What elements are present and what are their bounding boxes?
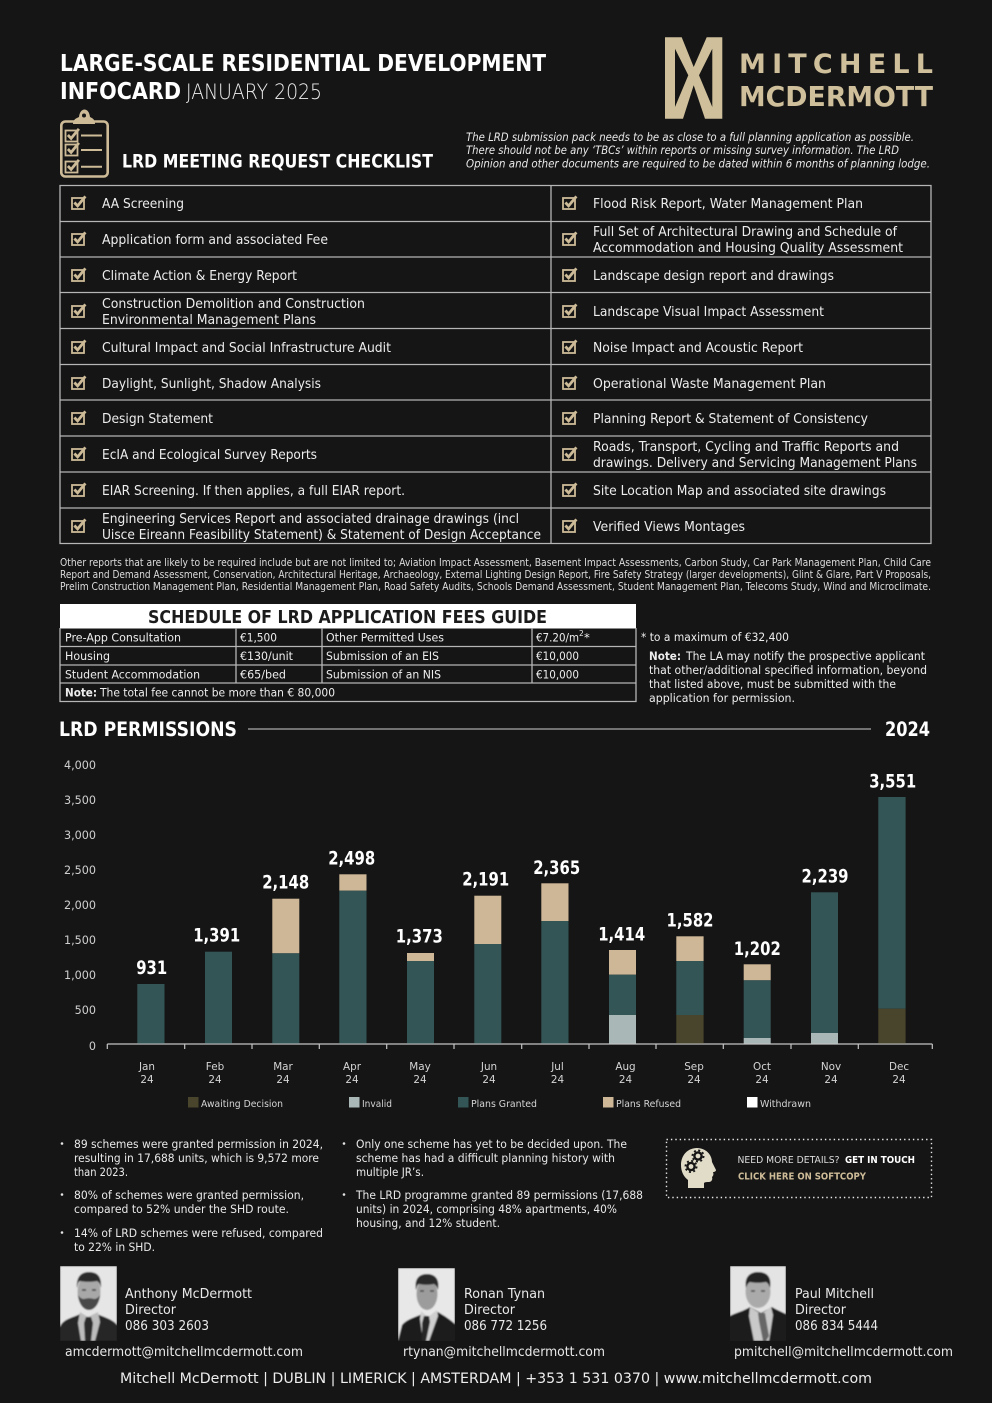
bar: Dec: 3,551 (869, 771, 916, 792)
bullet list: middle: Only one scheme has yet to be decided upon. The (356, 1137, 627, 1151)
y axis labels: 2,000 (64, 899, 96, 912)
bar: May (396, 927, 443, 1086)
intro note (466, 130, 930, 170)
bar: Aug (598, 925, 645, 1086)
fees row 3: €65/bed (240, 668, 286, 682)
fees row 3 (65, 668, 579, 682)
y axis labels: 3,000 (64, 829, 96, 842)
checklist row 8 right: drawings. Delivery and Servicing Management Plans (593, 456, 917, 471)
checklist row 10 left (72, 512, 541, 543)
checklist row 3 left: Climate Action & Energy Report (102, 269, 297, 284)
bullet list: middle: multiple JR’s. (356, 1165, 424, 1179)
bar: Dec (869, 771, 916, 1086)
checklist row 2 left: Application form and associated Fee (102, 233, 328, 248)
chart legend: Awaiting Decision (201, 1099, 283, 1110)
heading: LRD permissions (59, 718, 930, 741)
photo: Ronan Tynan (398, 1268, 455, 1341)
fees side note: application for permission. (649, 691, 795, 705)
title: JANUARY 2025 (186, 80, 322, 104)
fees row 3: Student Accommodation (65, 668, 200, 682)
bar: Jul: 24 (551, 1074, 564, 1086)
logo: Mitchell McDermott: MITCHELL (739, 49, 933, 80)
checklist row 5 right: Noise Impact and Acoustic Report (593, 341, 803, 356)
bullet list: left (61, 1137, 323, 1254)
checklist row 1 right: Flood Risk Report, Water Management Plan (593, 197, 863, 212)
logo: Mitchell McDermott: MCDERMOTT (739, 81, 933, 113)
panel: fees table (60, 604, 636, 702)
bar: Dec: 24 (892, 1074, 906, 1086)
bar: Jul (533, 858, 580, 1086)
bar: Nov: Nov (821, 1061, 841, 1073)
checklist row 9 left: EIAR Screening. If then applies, a full EIAR report. (102, 484, 405, 499)
bar: Apr: Apr (343, 1061, 362, 1073)
bar: Aug: 1,414 (598, 925, 645, 946)
title (60, 49, 546, 105)
x axis (107, 1044, 932, 1049)
checklist row 3 right: Landscape design report and drawings (593, 269, 834, 284)
bar: Jan: Jan (138, 1061, 155, 1073)
bar: May: 24 (413, 1074, 427, 1086)
other reports text block (60, 557, 931, 593)
intro note: There should not be any ‘TBCs’ within reports or missing survey information. The LRD (466, 143, 899, 157)
bullet list: left: compared to 52% under the SHD route. (74, 1202, 289, 1216)
heading: LRD permissions: LRD PERMISSIONS (59, 718, 237, 741)
checklist row 4 left: Environmental Management Plans (102, 313, 316, 328)
contact: Ronan Tynan: Director (464, 1303, 515, 1318)
photo: Paul Mitchell (730, 1266, 786, 1341)
checklist row 7 right: Planning Report & Statement of Consistency (593, 412, 868, 427)
bar: Jun (462, 870, 509, 1086)
bullet list: middle: units) in 2024, comprising 48% apartments, 40% (356, 1202, 617, 1216)
callout: get in touch: CLICK HERE ON SOFTCOPY (738, 1172, 867, 1182)
y axis labels (64, 759, 96, 1053)
y axis labels: 4,000 (64, 759, 96, 772)
checklist row 10 right: Verified Views Montages (593, 520, 745, 535)
bullet list: middle: scheme has had a difficult planning history with (356, 1151, 615, 1165)
fees row 3: €10,000 (536, 668, 579, 682)
intro note: The LRD submission pack needs to be as close to a full planning application as possible. (466, 130, 914, 144)
footer: Mitchell McDermott | DUBLIN | LIMERICK | AMSTERDAM | +353 1 531 0370 | www.mitchellmcdermott.com (120, 1370, 872, 1387)
bar: Mar: Mar (273, 1061, 294, 1073)
fees side note: that other/additional specified information, beyond (649, 663, 927, 677)
checklist row 10 left: Engineering Services Report and associated drainage drawings (incl (102, 512, 519, 527)
bar: Sep: 24 (687, 1074, 701, 1086)
bar: Mar (262, 872, 309, 1086)
contact: Paul Mitchell: pmitchell@mitchellmcdermott.com (734, 1345, 953, 1360)
fees row 1: 2 (579, 629, 584, 638)
bullet list: middle: housing, and 12% student. (356, 1216, 500, 1230)
fees note row: The total fee cannot be more than € 80,000 (99, 686, 335, 700)
bar: Jun: 2,191 (462, 870, 509, 891)
bullet list: left: 14% of LRD schemes were refused, compared (74, 1226, 323, 1240)
checklist row 4 right: Landscape Visual Impact Assessment (593, 305, 824, 320)
bar: Feb: 1,391 (193, 926, 240, 947)
contact: Paul Mitchell: Paul Mitchell (795, 1287, 874, 1302)
bar: Nov: 2,239 (802, 867, 848, 888)
checklist row 8 right: Roads, Transport, Cycling and Traffic Reports and (593, 440, 899, 455)
bar chart: LRD permissions by month (64, 759, 932, 1086)
checklist row 1 left (72, 196, 184, 212)
heading: LRD permissions: 2024 (885, 718, 930, 741)
fees row 3: Submission of an NIS (326, 668, 441, 682)
checklist row 2 right: Accommodation and Housing Quality Assessment (593, 241, 903, 256)
bar: Feb: Feb (206, 1061, 225, 1073)
bar: Apr (328, 848, 375, 1086)
bar: Oct (734, 939, 781, 1086)
y axis labels: 2,500 (64, 864, 96, 877)
bar: Aug: 24 (619, 1074, 632, 1086)
checklist row 9 right: Site Location Map and associated site drawings (593, 484, 886, 499)
contact: Ronan Tynan (398, 1268, 605, 1360)
fees row 1: * (584, 630, 590, 644)
fees side note: that listed above, must be submitted with the (649, 677, 896, 691)
bullet list: left: to 22% in SHD. (74, 1240, 155, 1254)
bar: Mar: 24 (276, 1074, 290, 1086)
checklist row 10 left: Uisce Eireann Feasibility Statement) & Statement of Design Acceptance (102, 528, 541, 543)
bar: Feb: 24 (208, 1074, 222, 1086)
bar: Mar: 2,148 (262, 872, 309, 893)
bar: Dec: Dec (889, 1061, 909, 1073)
bar: Apr: 24 (345, 1074, 359, 1086)
contact: Paul Mitchell (730, 1266, 953, 1360)
bar: Jun: Jun (480, 1061, 497, 1073)
checklist row 2 right (563, 225, 903, 256)
checklist row 5 left: Cultural Impact and Social Infrastructure Audit (102, 341, 391, 356)
contact: Ronan Tynan: rtynan@mitchellmcdermott.com (403, 1345, 605, 1360)
bar: Aug: Aug (615, 1061, 636, 1073)
bullet list: left: 80% of schemes were granted permission, (74, 1188, 304, 1202)
fees note row: Note: (65, 686, 97, 700)
fees row 1: €7.20/m (536, 630, 579, 644)
contact: Paul Mitchell: Director (795, 1303, 846, 1318)
fees row 1 (65, 629, 590, 644)
callout: get in touch: GET IN TOUCH (845, 1155, 915, 1166)
title: INFOCARD (60, 77, 181, 105)
title: LARGE-SCALE RESIDENTIAL DEVELOPMENT (60, 49, 546, 77)
chart legend: Plans Refused (616, 1099, 681, 1110)
checklist row 7 left: Design Statement (102, 412, 213, 427)
bar: Apr: 2,498 (328, 848, 375, 869)
bar: May: 1,373 (396, 927, 443, 948)
heading: checklist: LRD MEETING REQUEST CHECKLIST (122, 152, 433, 172)
bar: Jan: 24 (140, 1074, 154, 1086)
checklist row 8 left: EcIA and Ecological Survey Reports (102, 448, 317, 463)
callout: get in touch (666, 1140, 932, 1198)
photo: Anthony McDermott (60, 1266, 117, 1341)
fees row 1: Pre-App Consultation (65, 630, 181, 644)
bullet list: middle (343, 1137, 643, 1230)
bar: Jan: 931 (136, 958, 167, 979)
bar: Sep: 1,582 (666, 911, 714, 932)
chart legend: Withdrawn (760, 1099, 811, 1110)
bar: May: May (409, 1061, 431, 1073)
bar: Sep (666, 911, 714, 1086)
bar: Jul: Jul (550, 1061, 564, 1073)
chart legend: Plans Granted (471, 1099, 537, 1110)
y axis labels: 3,500 (64, 794, 96, 807)
checklist row 1 left: AA Screening (102, 197, 184, 212)
fees row 2 (65, 649, 579, 663)
contact: Anthony McDermott: 086 303 2603 (125, 1319, 209, 1334)
contact: Paul Mitchell: 086 834 5444 (795, 1319, 878, 1334)
fees row 1: €1,500 (240, 630, 277, 644)
chart legend (188, 1097, 811, 1110)
bar: Jun: 24 (482, 1074, 496, 1086)
fees side note: Note: (649, 649, 681, 663)
checklist row 4 left: Construction Demolition and Construction (102, 297, 365, 312)
contact: Anthony McDermott: Anthony McDermott (125, 1287, 252, 1302)
icon: head with gears (681, 1148, 716, 1188)
fees row 2: Housing (65, 649, 110, 663)
contact: Anthony McDermott: Director (125, 1303, 176, 1318)
bullet list: left: than 2023. (74, 1165, 128, 1179)
fees side note: * to a maximum of €32,400 (641, 630, 789, 644)
bar: Nov: 24 (824, 1074, 838, 1086)
panel: checklist table (60, 186, 931, 544)
bullet list: left: 89 schemes were granted permission in 2024, (74, 1137, 323, 1151)
fees row 2: Submission of an EIS (326, 649, 439, 663)
checklist row 2 right: Full Set of Architectural Drawing and Schedule of (593, 225, 897, 240)
y axis labels: 1,500 (64, 934, 96, 947)
fees table heading: SCHEDULE OF LRD APPLICATION FEES GUIDE (148, 607, 547, 628)
bar: Jan (136, 958, 167, 1086)
contact: Anthony McDermott (60, 1266, 303, 1360)
y axis labels: 0 (89, 1040, 96, 1053)
fees side note (641, 630, 927, 705)
contact: Ronan Tynan: 086 772 1256 (464, 1319, 547, 1334)
bar: Sep: Sep (684, 1061, 704, 1073)
bullet list: left: resulting in 17,688 units, which is 9,572 more (74, 1151, 319, 1165)
bar: Nov (802, 867, 848, 1086)
icon: clipboard checklist (61, 110, 108, 176)
fees row 1: Other Permitted Uses (326, 630, 444, 644)
checklist row 6 left: Daylight, Sunlight, Shadow Analysis (102, 377, 321, 392)
logo: Mitchell McDermott (665, 37, 933, 119)
checklist row 8 right (563, 440, 917, 471)
fees row 2: €10,000 (536, 649, 579, 663)
contact: Ronan Tynan: Ronan Tynan (464, 1287, 545, 1302)
fees row 2: €130/unit (240, 649, 293, 663)
intro note: Opinion and other documents are required to be dated within 6 months of planning lodge. (466, 156, 930, 170)
checklist row 4 left (72, 297, 365, 328)
bullet list: middle: The LRD programme granted 89 permissions (17,688 (355, 1188, 643, 1202)
fees side note: The LA may notify the prospective applicant (685, 649, 925, 663)
callout: get in touch: NEED MORE DETAILS? (738, 1155, 840, 1166)
checklist row 6 right: Operational Waste Management Plan (593, 377, 826, 392)
bar: Oct: Oct (753, 1061, 771, 1073)
bar: Oct: 24 (755, 1074, 769, 1086)
bar: Feb (193, 926, 240, 1086)
y axis labels: 1,000 (64, 969, 96, 982)
contact: Anthony McDermott: amcdermott@mitchellmcdermott.com (65, 1345, 303, 1360)
chart legend: Invalid (362, 1099, 392, 1110)
bar: Jul: 2,365 (533, 858, 580, 879)
y axis labels: 500 (75, 1004, 96, 1017)
bar: Oct: 1,202 (734, 939, 781, 960)
